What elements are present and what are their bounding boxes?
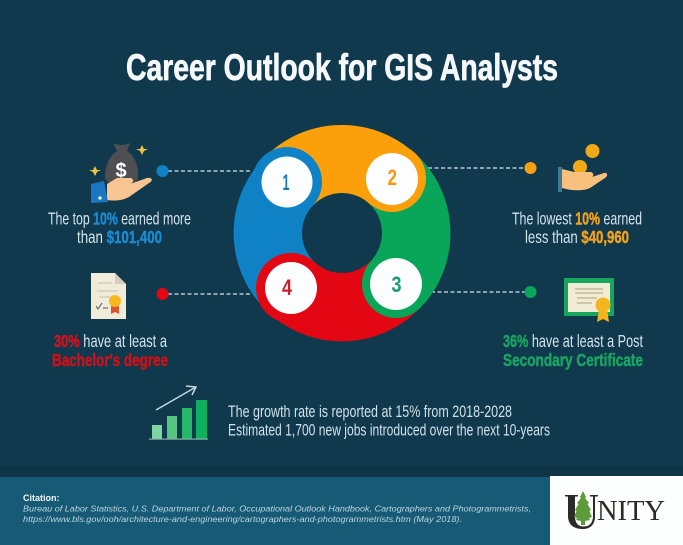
- citation: Citation:: [23, 493, 60, 503]
- citation: [23, 493, 531, 524]
- badge 2: [366, 153, 418, 205]
- logo panel: [550, 476, 683, 545]
- connector lines: [168, 168, 525, 294]
- text: post secondary: [503, 331, 643, 370]
- dot: blue: [156, 165, 168, 177]
- text: top 10%: [48, 208, 191, 247]
- ring centre hole: [302, 193, 382, 273]
- icon: coins in hand: [558, 144, 607, 192]
- badge 1: 1: [282, 170, 290, 195]
- text: lowest 10%: [512, 208, 642, 247]
- text: growth rate: [228, 403, 550, 440]
- badge 3: 3: [392, 272, 402, 297]
- ring diagram: [234, 125, 450, 341]
- dot: red: [156, 288, 168, 300]
- ring head: red: [256, 253, 326, 323]
- ring segment: green: [342, 158, 450, 304]
- icon: certificate: [564, 278, 614, 322]
- icon: money bag in hand: $: [115, 160, 127, 182]
- icon: degree document: [91, 273, 126, 319]
- logo: wordmark: NITY: [597, 495, 665, 527]
- text: bachelor's: Bachelor's degree: [52, 350, 168, 370]
- text: bachelor's: 30% have at least a: [54, 331, 167, 351]
- dot: green: [524, 286, 536, 298]
- text: top 10%: than $101,400: [77, 227, 162, 247]
- logo: U letter: [565, 495, 598, 529]
- citation: https://www.bls.gov/ooh/architecture-and-engineering/cartographers-and-photogrammetrists.htm (May 2018).: [23, 514, 462, 524]
- text: post secondary: Secondary Certificate: [503, 350, 643, 370]
- ring segment: orange: [263, 125, 424, 233]
- text: growth rate: Estimated 1,700 new jobs introduced over the next 10-years: [228, 422, 550, 440]
- ring head: orange: [358, 144, 426, 212]
- badge 4: 4: [282, 275, 293, 300]
- badge 2: 2: [388, 165, 397, 190]
- ring head: blue: [252, 147, 322, 217]
- icon: money bag in hand: [89, 143, 152, 203]
- icon: growth bar chart: [149, 386, 208, 440]
- text: post secondary: 36% have at least a Post: [503, 331, 643, 351]
- text: growth rate: The growth rate is reported at 15% from 2018-2028: [228, 403, 512, 421]
- badge 1: [262, 156, 312, 208]
- text: bachelor's: [52, 331, 168, 370]
- logo: tree: [574, 491, 592, 525]
- ring head: green: [362, 250, 430, 318]
- footer band: [0, 477, 683, 545]
- text: lowest 10%: less than $40,960: [525, 227, 629, 247]
- citation: Bureau of Labor Statistics, U.S. Department of Labor, Occupational Outlook Handbook, Cartographers and Photogrammetrists,: [23, 504, 531, 514]
- dot: orange: [524, 162, 536, 174]
- ring segment: red: [262, 233, 420, 341]
- text: top 10%: The top 10% earned more: [48, 208, 191, 228]
- ring segment: blue: [234, 154, 342, 306]
- text: lowest 10%: The lowest 10% earned: [512, 208, 642, 228]
- badge 3: [370, 258, 422, 310]
- title: Career Outlook for GIS Analysts: [126, 47, 558, 88]
- badge 4: [265, 262, 317, 314]
